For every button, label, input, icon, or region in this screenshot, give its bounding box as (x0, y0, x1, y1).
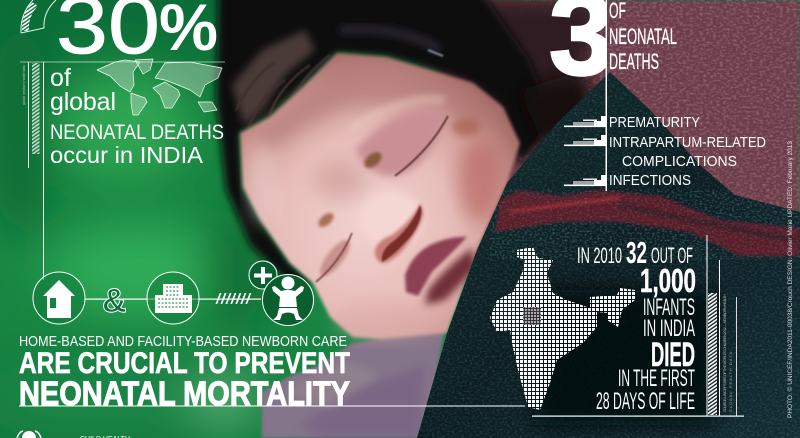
world map (97, 59, 222, 115)
heading: are crucial to prevent neonatal mortality (19, 347, 350, 413)
text: 30% of global neonatal deaths occur in India: of (50, 64, 71, 92)
source lines and hatch block: GLOBAL HEALTH DATA (729, 352, 733, 412)
hairline shading (252, 65, 500, 150)
cause: intrapartum-related complications: INTRAPARTUM-RELATED (609, 135, 766, 151)
big stat: 30% (56, 0, 218, 71)
text: of neonatal deaths: NEONATAL (609, 24, 677, 49)
text: 30% of global neonatal deaths occur in India: global (50, 88, 116, 116)
text: in 2010 32 out of 1,000 infants in India died in the first 28 days of life: IN 2010 (577, 243, 622, 268)
text: in 2010 32 out of 1,000 infants in India died in the first 28 days of life: IN THE FIRST (618, 365, 695, 392)
connector line between icons (85, 298, 261, 300)
mauve blanket (440, 0, 800, 260)
text: in 2010 32 out of 1,000 infants in India died in the first 28 days of life: INFANTS (643, 294, 695, 321)
lips (405, 237, 476, 305)
icon: step bar (564, 175, 606, 186)
text: of neonatal deaths: DEATHS (609, 49, 659, 74)
text: in 2010 32 out of 1,000 infants in India died in the first 28 days of life: OUT OF (651, 243, 693, 268)
text: home-based and facility-based newborn care: HOME-BASED AND FACILITY-BASED NEWBORN CARE (19, 333, 347, 350)
text: of neonatal deaths (609, 0, 677, 74)
dark hair (216, 0, 555, 285)
vertical rule beside the 3 (606, 0, 607, 191)
map of India made of dots (488, 245, 640, 413)
source lines and hatch block: SOURCE: UNICEF STATE OF THE WORLD'S CHILDREN 2012 — NEWBORN HEALTH (723, 294, 727, 412)
icon: step bar (564, 135, 606, 146)
partner logo, cut off at bottom (17, 431, 130, 438)
text: in 2010 32 out of 1,000 infants in India died in the first 28 days of life (577, 235, 696, 415)
icon: step bar (564, 116, 606, 127)
icon: plus sign and baby (249, 261, 314, 326)
heading: are crucial to prevent neonatal mortality: NEONATAL MORTALITY (19, 375, 350, 413)
gauge icon, top left (21, 0, 56, 33)
baby face (240, 53, 520, 339)
icon: health facility building in circle (147, 272, 199, 324)
frame lines and side hatch (20, 62, 225, 280)
nose (360, 190, 424, 263)
cause: intrapartum-related complications (609, 135, 766, 170)
frame lines and side hatch: global newborn health data (22, 65, 26, 105)
cause: infections: INFECTIONS (609, 173, 691, 189)
hatched connector: /////// (215, 291, 252, 308)
baseline rule under heading (19, 406, 525, 407)
text: in 2010 32 out of 1,000 infants in India died in the first 28 days of life: DIED (651, 336, 695, 374)
cause: intrapartum-related complications: COMPLICATIONS (622, 154, 737, 170)
source lines and hatch block (532, 235, 744, 417)
left closed eye (315, 210, 355, 282)
text: in 2010 32 out of 1,000 infants in India died in the first 28 days of life: 28 DAYS OF LIFE (596, 388, 695, 415)
icon: house in circle (33, 272, 85, 324)
cause: prematurity: PREMATURITY (609, 115, 700, 131)
text: 30% of global neonatal deaths occur in India: occur in INDIA (50, 142, 204, 168)
dark knit shawl (410, 70, 800, 438)
heading: are crucial to prevent neonatal mortality: ARE CRUCIAL TO PREVENT (19, 347, 350, 380)
text: in 2010 32 out of 1,000 infants in India died in the first 28 days of life: 32 (626, 235, 647, 270)
text: 30% of global neonatal deaths occur in India (50, 64, 224, 168)
cloth under the chin (262, 328, 445, 438)
text: 30% of global neonatal deaths occur in India: NEONATAL DEATHS (50, 121, 224, 144)
right closed eye (350, 99, 448, 176)
text: in 2010 32 out of 1,000 infants in India died in the first 28 days of life: 1,000 (640, 262, 696, 299)
credits, vertical: PHOTO: © UNICEF/INDA2011-00038/Crouch DESIGN: Olivier Marie UPDATED: February 2013 (786, 141, 794, 418)
list: causes of neonatal deaths (564, 115, 766, 189)
text: in 2010 32 out of 1,000 infants in India died in the first 28 days of life: IN INDIA (643, 315, 695, 342)
ampersand: & (102, 282, 127, 320)
